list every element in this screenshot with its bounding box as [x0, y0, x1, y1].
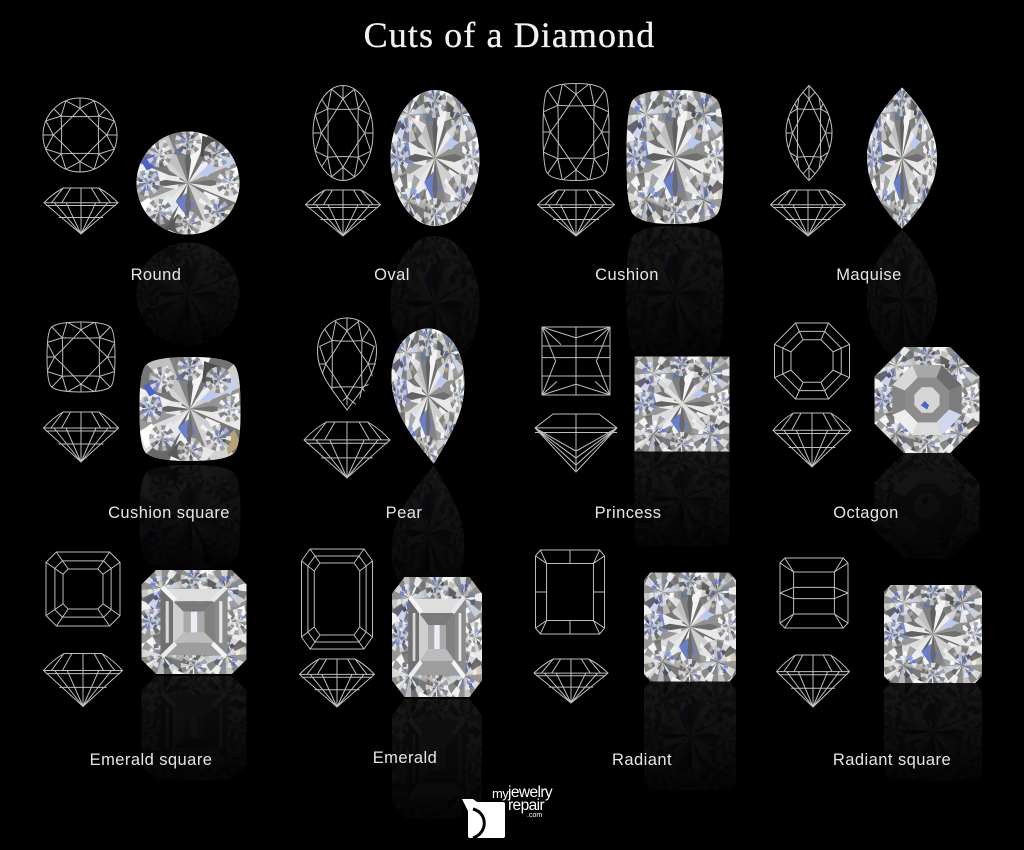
reflection: emerald square: [142, 676, 246, 770]
logo: my jewelry repair: [462, 784, 553, 838]
reflection: octagon: [874, 453, 980, 548]
label: Round: Round: [131, 266, 181, 284]
wireframe: emerald top view: [302, 549, 372, 649]
wireframe: cushion square side view: [44, 412, 118, 462]
diamond: marquise: [867, 88, 937, 228]
reflection: marquise: [867, 230, 937, 350]
diamond: princess: [634, 356, 730, 452]
diamond: radiant square: [855, 556, 1011, 712]
wireframe: pear side view: [304, 422, 390, 478]
wireframe: octagon top view: [774, 323, 850, 399]
wireframe: princess top view: [542, 327, 610, 395]
reflection: radiant: [644, 682, 736, 780]
reflection: cushion: [626, 226, 724, 347]
reflection: pear: [392, 466, 464, 581]
panel: Oval: [304, 85, 480, 349]
wireframe: oval side view: [306, 190, 380, 236]
panel: Octagon: [772, 322, 980, 548]
panel: Emerald: [298, 548, 482, 807]
diamond: oval: [390, 90, 480, 226]
wireframe: round top view: [42, 98, 118, 172]
wireframe: cushion side view: [538, 190, 614, 236]
panel: Marquise: [770, 84, 937, 350]
logo text: .com: [527, 812, 542, 819]
wireframe: emerald side view: [300, 659, 374, 707]
panel: Radiant: [533, 550, 736, 780]
label: Emerald square: Emerald square: [90, 751, 212, 769]
reflection: cushion square: [140, 465, 240, 559]
diamond: emerald: [392, 577, 482, 697]
label: Pear: Pear: [386, 504, 422, 522]
wireframe: emerald square side view: [44, 654, 122, 706]
icon: ring in square: [462, 799, 505, 838]
panel: Cushion square: [42, 322, 240, 559]
reflection: princess: [634, 452, 730, 537]
diamond: cushion square: [140, 357, 240, 461]
wireframe: oval top view: [312, 85, 374, 181]
wireframe: pear top view: [317, 318, 377, 411]
wireframe: round side view: [44, 188, 118, 234]
label: Octagon: Octagon: [833, 504, 899, 522]
wireframe: cushion square top view: [46, 322, 116, 392]
wireframe: cushion top view: [542, 83, 610, 181]
reflection: oval: [390, 236, 480, 349]
panel: Round: [42, 98, 240, 336]
diamond: cushion: [626, 90, 724, 224]
wireframe: radiant top view: [536, 550, 604, 634]
panel: Cushion: [536, 83, 724, 347]
wireframe: emerald square top view: [46, 552, 120, 626]
label: Cushion: Cushion: [595, 266, 659, 284]
panel: Princess: [534, 326, 730, 537]
diamond: emerald square: [142, 570, 246, 674]
label: Radiant: Radiant: [612, 751, 672, 769]
label: Princess: Princess: [595, 504, 661, 522]
wireframe: radiant side view: [534, 659, 608, 703]
logo text: repair: [508, 797, 544, 814]
reflection: radiant square: [855, 654, 1011, 810]
panel: Pear: [303, 318, 464, 581]
label: Maquise: Maquise: [836, 266, 902, 284]
wireframe: octagon side view: [773, 413, 851, 467]
wireframe: radiant square top view: [780, 558, 848, 628]
label: Cushion square: Cushion square: [108, 504, 230, 522]
diamond: round: [136, 132, 240, 234]
wireframe: princess side view: [535, 414, 617, 472]
label: Emerald: Emerald: [373, 749, 437, 767]
reflection: emerald: [392, 699, 482, 807]
wireframe: marquise side view: [770, 190, 846, 236]
diamond: pear: [392, 328, 464, 464]
wireframe: radiant square side view: [776, 655, 850, 707]
title: Cuts of a Diamond: [364, 15, 655, 55]
logo text: my: [492, 786, 509, 801]
diamond: octagon: [874, 347, 980, 453]
wireframe: marquise top view: [785, 84, 832, 182]
label: Oval: Oval: [374, 266, 410, 284]
diamond: radiant: [644, 572, 736, 682]
panel: Emerald square: [42, 552, 246, 770]
reflection: round: [136, 242, 240, 336]
label: Radiant square: Radiant square: [833, 751, 951, 769]
panel: Radiant square: [776, 558, 982, 772]
logo text: jewelry: [507, 784, 553, 801]
